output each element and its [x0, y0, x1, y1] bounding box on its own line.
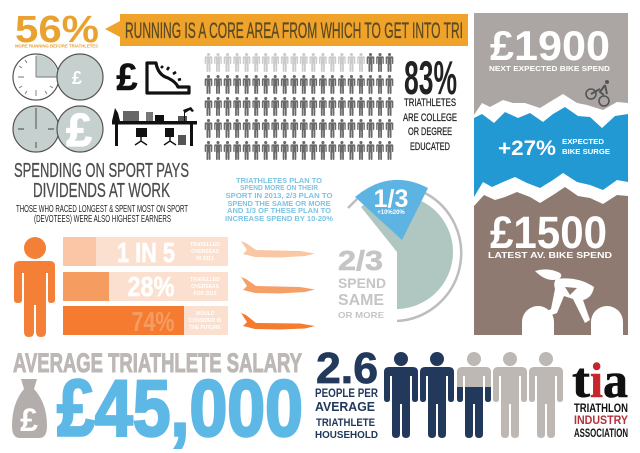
expected surge: BIKE SURGE: [562, 149, 610, 156]
text: two thirds spend same: 2/3: [338, 245, 383, 276]
expected surge: +27%: [498, 137, 556, 160]
text: two thirds spend same: [338, 245, 386, 320]
bar: 28%: FOR 2013: [193, 291, 217, 297]
icon: large pound coin: £: [66, 104, 92, 156]
text: two thirds spend same: SAME: [338, 292, 384, 309]
heading: average salary: AVERAGE TRIATHLETE SALARY: [13, 348, 302, 378]
salary figure: £45,000: [57, 364, 303, 452]
text: two thirds spend same: SPEND: [338, 275, 386, 291]
household statistic: AVERAGE: [315, 400, 375, 414]
icon: large pound coin: [57, 104, 103, 156]
56% statistic: MORE RUNNING BEFORE TRIATHLETES: [15, 44, 98, 48]
expected surge: [498, 137, 610, 160]
latest spend: £1500: [490, 207, 607, 258]
icon: road cyclist: [522, 269, 623, 335]
icon: mountain biker: [586, 80, 609, 106]
latest spend: LATEST AV. BIKE SPEND: [488, 251, 612, 260]
bar: 28%: TRAVELLED: [190, 277, 220, 283]
icon: mid plane: [241, 277, 315, 294]
83% statistic: 83%: [404, 51, 457, 104]
text: blue spending note: TRIATHLETES PLAN TO: [236, 176, 322, 185]
logo: triathlon industry association: [572, 352, 628, 440]
heading: spending on sport: SPENDING ON SPORT PAYS: [14, 160, 189, 182]
56% statistic: 56%: [15, 9, 99, 51]
bar: 1 in 5: [63, 237, 228, 268]
text: blue spending note: [225, 176, 333, 223]
heading: spending on sport: DIVIDENDS AT WORK: [33, 180, 170, 202]
logo: triathlon industry association: t: [572, 352, 590, 408]
text: blue spending note: INCREASE SPEND BY 10-20%: [225, 214, 333, 223]
expected surge: EXPECTED: [562, 139, 604, 146]
logo: triathlon industry association: i: [590, 352, 603, 408]
83% statistic: [403, 51, 457, 153]
household statistic: TRIATHLETE: [316, 417, 375, 429]
logo: triathlon industry association: a: [603, 352, 628, 408]
bar: 74%: THE FUTURE: [189, 325, 221, 331]
icon: small pound coin: [57, 54, 103, 100]
bar: 1 in 5: 1 IN 5: [117, 237, 175, 268]
bar: 74%: WOULD: [196, 311, 215, 317]
icon: money bag: £: [20, 402, 38, 438]
83% statistic: EDUCATED: [410, 141, 450, 153]
next expected spend: £1900: [490, 22, 610, 69]
panel: bike spend: [474, 13, 628, 335]
icon: pound sign: £: [116, 57, 138, 99]
blue one third wedge: [355, 180, 428, 240]
icon: dark plane: [241, 313, 315, 330]
bar: 28%: 28%: [128, 271, 175, 302]
icon: money bag: [12, 379, 47, 438]
household statistic: HOUSEHOLD: [315, 429, 378, 441]
icon: cash register: [147, 63, 189, 93]
text: blue spending note: SPEND THE SAME OR MORE: [228, 199, 331, 208]
chart: spend pie: [348, 180, 461, 321]
text: two thirds spend same: OR MORE: [338, 310, 384, 320]
household statistic: [315, 344, 378, 441]
text: devotees subtitle: (DEVOTEES) WERE ALSO HIGHEST EARNERS: [34, 213, 171, 225]
pictogram: household people: [384, 352, 563, 438]
bar: 74%: 74%: [132, 306, 175, 337]
banner: running headline: [105, 14, 468, 46]
text: blue spending note: SPEND MORE ON THEIR: [240, 183, 319, 192]
icon: small pound coin: £: [72, 68, 82, 88]
text: blue spending note: SPORT IN 2013, 2/3 PLAN TO: [226, 191, 333, 200]
bar: 1 in 5: IN 2012: [196, 256, 214, 262]
bar: 1 in 5: TRAVELLED: [190, 242, 220, 248]
blue one third wedge: 1/3: [374, 185, 408, 213]
household statistic: PEOPLE PER: [315, 386, 378, 400]
blue one third wedge: +10%20%: [377, 210, 405, 216]
83% statistic: ARE COLLEGE: [403, 112, 457, 124]
bar: 28%: [63, 271, 228, 302]
icon: clock with quarter shaded: [13, 54, 59, 100]
text: blue spending note: AND 1/3 OF THESE PLAN TO: [227, 206, 331, 215]
text: devotees subtitle: [16, 203, 188, 225]
household statistic: 2.6: [316, 344, 378, 393]
83% statistic: TRIATHLETES: [404, 97, 456, 109]
bar: 74%: CONSIDER IN: [189, 318, 222, 324]
icon: office desks: [112, 107, 197, 146]
icon: shaded clock: [13, 106, 59, 152]
83% statistic: OR DEGREE: [408, 126, 452, 138]
text: devotees subtitle: THOSE WHO RACED LONGEST & SPENT MOST ON SPORT: [16, 203, 188, 215]
bar: 28%: OVERSEAS: [191, 284, 220, 290]
icon: light plane: [241, 241, 315, 258]
bar: 74%: [63, 306, 228, 337]
bar: 1 in 5: OVERSEAS: [191, 249, 220, 255]
pictogram: people grid 83 percent: [205, 53, 393, 160]
next expected spend: NEXT EXPECTED BIKE SPEND: [489, 64, 611, 73]
heading: spending on sport: [14, 160, 189, 202]
icon: orange person: [14, 237, 55, 337]
logo: triathlon industry association: INDUSTRY: [574, 413, 628, 427]
